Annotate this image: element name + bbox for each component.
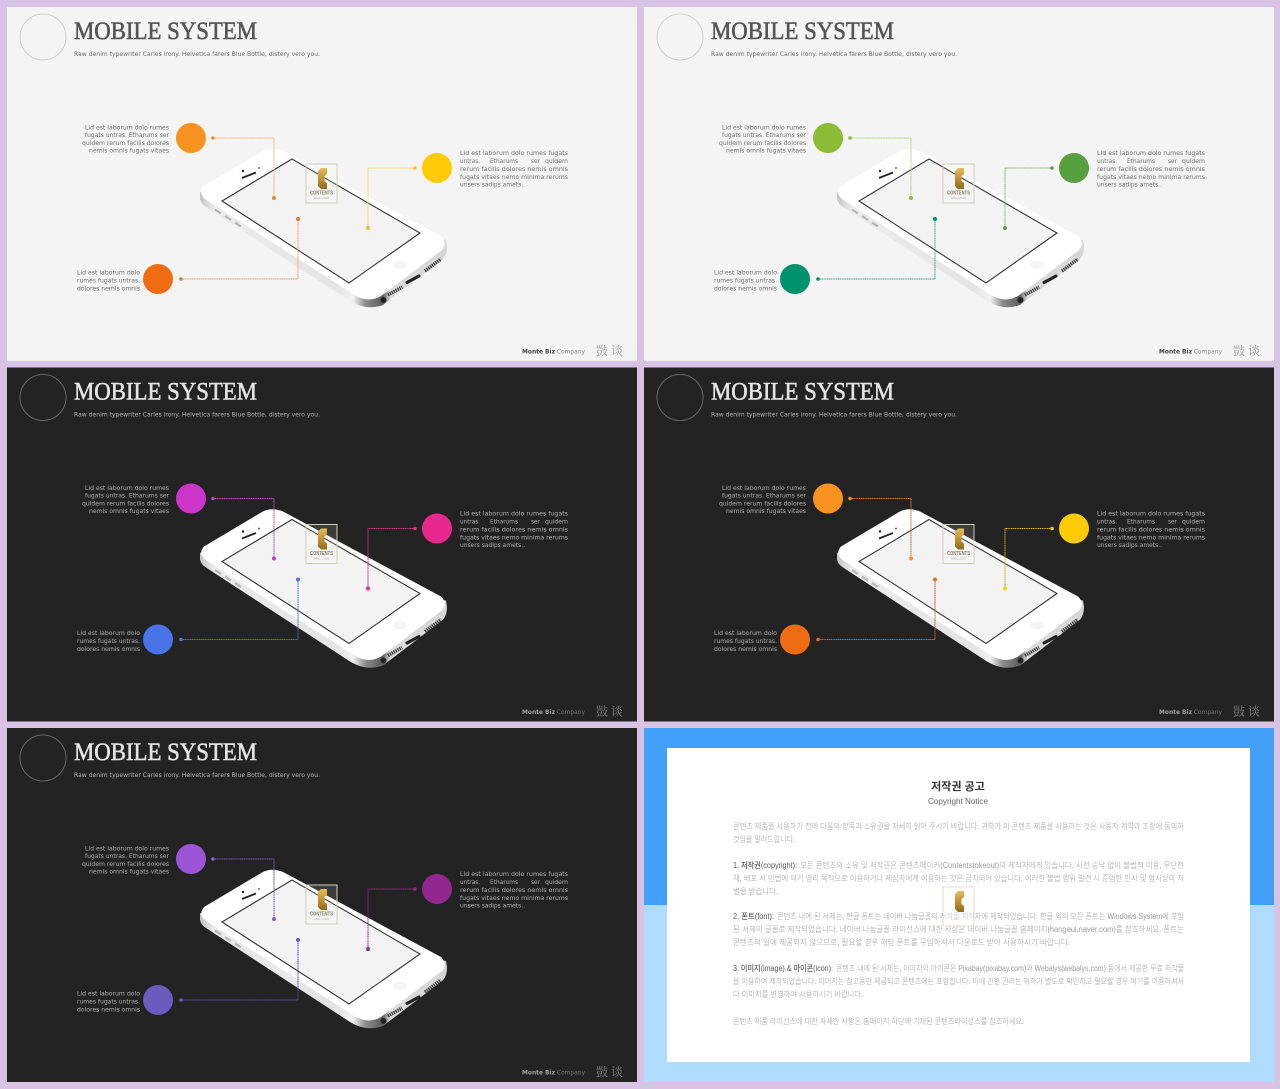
panel: dark slide, purple	[7, 728, 637, 1082]
subtitle: Raw denim typewriter Carles irony. Helvetica farers Blue Bottle, distery vero you.	[74, 50, 320, 58]
notice closing line: 콘텐츠 제품 라이선스에 대한 자세한 사항은 홈페이지 하단에 기재된 콘텐츠라이선스를 참조하세요.	[733, 1016, 1024, 1026]
header circle	[657, 374, 703, 420]
watermark	[306, 524, 337, 564]
callout: bottom left: dolores nemis omnis	[714, 645, 778, 653]
callout: right: fugats vitaes nemo minima rerums	[1097, 534, 1206, 542]
callout: right: quidem	[545, 518, 568, 526]
footer: 敱 谈	[1233, 704, 1260, 718]
callout: right: fugats vitaes nemo minima rerums	[1097, 173, 1206, 181]
footer: 敱 谈	[1233, 343, 1260, 358]
callout: right: Lid est laborum dolo rumes fugats	[460, 149, 569, 157]
callout: top left	[719, 123, 913, 200]
callout: right	[1003, 510, 1206, 590]
footer: Monte Biz Company	[522, 348, 585, 356]
callout: top left: quidem rerum facilis dolores	[719, 139, 807, 147]
phone illustration	[200, 509, 447, 668]
callout: bottom left: Lid est laborum dolo	[714, 268, 777, 276]
callout: right: quidem	[1182, 157, 1205, 165]
callout: right: quidem	[545, 878, 568, 886]
header circle	[20, 374, 66, 420]
footer	[1159, 343, 1260, 358]
callout: right: unsers sadips amets..	[460, 902, 525, 910]
callout: right	[366, 870, 569, 951]
notice section 1: 재, 배포 시 민법에 의거 영리 목적으로 이용하거나 제삼자에게 이용하는 것은 금지되어 있습니다. 이러한 불법 행위 발견 시 준엄한 민사 및 형사상의 처	[733, 873, 1184, 883]
callout: top left: Lid est laborum dolo rumes	[85, 844, 170, 852]
notice intro: 콘텐츠 제품을 사용하기 전에 다음의 항목과 소유권을 자세히 읽어 주시기 바랍니다. 귀하가 이 콘텐츠 제품을 사용하는 것은 사용자 계약과 조항에 동의하	[733, 821, 1185, 831]
callout: bottom left	[77, 938, 300, 1015]
callout: bottom left: dolores nemis omnis	[77, 645, 141, 653]
callout: top left: Lid est laborum dolo rumes	[722, 124, 807, 132]
callout: top left: quidem rerum facilis dolores	[719, 500, 807, 508]
notice section 1: 모든 콘텐츠의 소유 및 저작권은 콘텐츠메이커(Contentstokeout)의 제작자에게 있습니다. 사전 승낙 없이 불법적 이용, 무단전	[800, 860, 1184, 870]
footer	[522, 1064, 623, 1079]
callout: right: ser	[531, 157, 540, 165]
notice section 2: 된 서체의 글꼴로 제작되었습니다. 네이버 나눔글꼴 라이선스에 대한 사항은 네이버 나눔글꼴 홈페이지(hangeul.naver.com)를 참조하세요. 폰트는	[733, 924, 1184, 934]
callout: top left	[82, 123, 276, 200]
phone illustration	[837, 509, 1084, 668]
footer	[522, 343, 623, 358]
header circle	[20, 14, 66, 60]
callout: right: Etharums	[490, 518, 519, 526]
footer	[522, 704, 623, 718]
callout: bottom left: rumes fugats untras.	[77, 998, 140, 1006]
callout: right	[1003, 149, 1206, 230]
panel: copyright notice	[644, 728, 1274, 1082]
footer: 敱 谈	[596, 1064, 623, 1079]
callout: right: ser	[531, 518, 540, 526]
callout: top left: nemis omnis fugats vitaes	[89, 507, 170, 515]
callout: bottom left: Lid est laborum dolo	[77, 268, 140, 276]
notice section 3: 을 이용하여 제작되었습니다. 이미지는 참고용만 제공되고 콘텐츠에는 포함합니다. 이에 관한 권리는 귀하가 별도로 확인하고 필요할 경우 여기를 이용하셔서	[733, 976, 1184, 986]
callout: top left: fugats untras. Etharums ser	[85, 131, 169, 139]
callout: top left	[82, 844, 276, 921]
footer: Monte Biz Company	[1159, 709, 1222, 716]
footer: Monte Biz Company	[522, 709, 585, 716]
callout: right: ser	[1168, 157, 1177, 165]
footer: Monte Biz Company	[522, 1070, 585, 1076]
notice section 1: 벌을 받습니다.	[733, 887, 778, 896]
subtitle: Raw denim typewriter Carles irony. Helvetica farers Blue Bottle, distery vero you.	[74, 771, 320, 779]
callout: top left: quidem rerum facilis dolores	[82, 139, 170, 147]
callout: bottom left	[714, 217, 937, 294]
callout: top left: Lid est laborum dolo rumes	[85, 124, 170, 132]
watermark: WALL LOGO	[951, 556, 967, 560]
callout: bottom left: rumes fugats untras.	[714, 637, 777, 645]
callout: bottom left: dolores nemis omnis	[77, 284, 141, 292]
subtitle: Raw denim typewriter Carles irony. Helvetica farers Blue Bottle, distery vero you.	[711, 410, 957, 418]
watermark	[306, 164, 337, 203]
heading: MOBILE SYSTEM	[74, 18, 257, 45]
callout: bottom left	[77, 578, 300, 654]
callout: top left: nemis omnis fugats vitaes	[89, 868, 170, 876]
notice section 3: 다 이미지를 변경하여 사용하시기 바랍니다.	[733, 989, 863, 999]
callout: right: Lid est laborum dolo rumes fugats	[1097, 149, 1206, 157]
watermark: WALL LOGO	[314, 556, 330, 560]
callout: bottom left: rumes fugats untras.	[714, 276, 777, 284]
notice intro: 것임을 알려드립니다.	[733, 835, 795, 844]
callout: right: ser	[1168, 518, 1177, 526]
callout: right: Etharums	[1127, 157, 1156, 165]
callout: right: unsers sadips amets..	[460, 541, 525, 549]
callout: right: rerum facilis dolores nemis omnis	[1097, 526, 1206, 534]
watermark: WALL LOGO	[314, 917, 330, 921]
callout: right: Lid est laborum dolo rumes fugats	[1097, 510, 1206, 518]
callout: right: Etharums	[490, 878, 519, 886]
notice card	[667, 748, 1250, 1062]
watermark	[306, 885, 337, 924]
callout: right: Etharums	[1127, 518, 1156, 526]
callout: bottom left: rumes fugats untras.	[77, 637, 140, 645]
watermark	[943, 524, 974, 564]
callout: top left: nemis omnis fugats vitaes	[726, 507, 807, 515]
subtitle: Raw denim typewriter Carles irony. Helvetica farers Blue Bottle, distery vero you.	[711, 50, 957, 58]
callout: top left: quidem rerum facilis dolores	[82, 500, 170, 508]
callout: right: quidem	[545, 157, 568, 165]
callout: right: quidem	[1182, 518, 1205, 526]
panel: light slide, green	[644, 7, 1274, 361]
callout: bottom left: Lid est laborum dolo	[77, 990, 140, 998]
callout: bottom left: rumes fugats untras.	[77, 276, 140, 284]
callout: top left	[82, 484, 276, 560]
callout: right	[366, 149, 569, 230]
callout: right: unsers sadips amets..	[1097, 180, 1162, 188]
callout: right: rerum facilis dolores nemis omnis	[1097, 165, 1206, 173]
footer: Monte Biz Company	[1159, 348, 1222, 356]
callout: right: untras.	[460, 157, 480, 165]
callout: top left: fugats untras. Etharums ser	[85, 852, 169, 860]
callout: top left: Lid est laborum dolo rumes	[722, 484, 807, 492]
callout: right: untras.	[1097, 518, 1117, 526]
watermark: CONTENTS	[310, 551, 334, 557]
notice section 1: 1. 저작권(copyright):	[733, 860, 797, 870]
heading: MOBILE SYSTEM	[74, 378, 257, 406]
notice section 2: 콘텐츠 내에 된 서체는, 한글 폰트는 네이버 나눔글꼴의 저작물 제작자에 제작되었습니다. 한글 외의 모든 폰트는 Windows System에 포함	[777, 911, 1185, 921]
notice section 2: 2. 폰트(font):	[733, 912, 774, 921]
footer	[1159, 704, 1260, 718]
header circle	[20, 735, 66, 781]
heading: MOBILE SYSTEM	[711, 378, 894, 406]
subtitle: Raw denim typewriter Carles irony. Helvetica farers Blue Bottle, distery vero you.	[74, 410, 320, 418]
callout: right: unsers sadips amets..	[460, 180, 525, 188]
callout: right: fugats vitaes nemo minima rerums	[460, 534, 569, 542]
callout: right: ser	[531, 878, 540, 886]
panel: dark slide, orange and yellow	[644, 368, 1274, 722]
callout: right: fugats vitaes nemo minima rerums	[460, 894, 569, 902]
notice section 3: 3. 이미지(image) & 아이콘(icon):	[733, 963, 833, 973]
callout: top left: nemis omnis fugats vitaes	[726, 146, 807, 154]
watermark: WALL LOGO	[314, 196, 330, 200]
notice section 3: 콘텐츠 내에 된 서체는, 이미지와 아이콘은 Pixabay(pixabay.com)와 Webalys(webalys.com) 등에서 제공한 무료 저작물	[836, 963, 1184, 973]
watermark	[943, 164, 974, 203]
callout: right: untras.	[1097, 157, 1117, 165]
callout: right: fugats vitaes nemo minima rerums	[460, 173, 569, 181]
callout: bottom left: dolores nemis omnis	[714, 284, 778, 292]
callout: bottom left: dolores nemis omnis	[77, 1006, 141, 1014]
callout: top left: nemis omnis fugats vitaes	[89, 146, 170, 154]
footer: 敱 谈	[596, 704, 623, 718]
callout: top left: fugats untras. Etharums ser	[722, 492, 806, 500]
callout: right: rerum facilis dolores nemis omnis	[460, 165, 569, 173]
heading: MOBILE SYSTEM	[711, 18, 894, 45]
notice heading: 저작권 공고	[931, 779, 985, 793]
heading: MOBILE SYSTEM	[74, 739, 257, 766]
callout: right: rerum facilis dolores nemis omnis	[460, 886, 569, 894]
callout: bottom left: Lid est laborum dolo	[77, 629, 140, 637]
callout: top left: quidem rerum facilis dolores	[82, 860, 170, 868]
panel: light slide, orange and yellow	[7, 7, 637, 361]
watermark: CONTENTS	[947, 551, 971, 557]
callout: right: Etharums	[490, 157, 519, 165]
callout: right: rerum facilis dolores nemis omnis	[460, 526, 569, 534]
watermark: WALL LOGO	[951, 196, 967, 200]
watermark: CONTENTS	[310, 190, 334, 196]
phone illustration	[837, 149, 1084, 307]
notice subheading: Copyright Notice	[928, 797, 989, 806]
phone illustration	[200, 149, 447, 307]
callout: top left: fugats untras. Etharums ser	[85, 492, 169, 500]
panel: dark slide, magenta and blue	[7, 368, 637, 722]
callout: right: Lid est laborum dolo rumes fugats	[460, 510, 569, 518]
callout: top left: Lid est laborum dolo rumes	[85, 484, 170, 492]
callout: top left	[719, 484, 913, 560]
callout: bottom left: Lid est laborum dolo	[714, 629, 777, 637]
callout: top left: fugats untras. Etharums ser	[722, 131, 806, 139]
watermark: CONTENTS	[947, 190, 971, 196]
watermark: CONTENTS	[310, 912, 334, 918]
callout: right	[366, 510, 569, 590]
callout: bottom left	[77, 217, 300, 294]
footer: 敱 谈	[596, 343, 623, 358]
notice section 2: 콘텐츠의 일에 제공되지 않으므로, 필요할 경우 해당 폰트를 구입하셔서 다운로드 받아 사용하시기 바랍니다.	[733, 937, 1070, 947]
callout: bottom left	[714, 578, 937, 654]
watermark	[943, 887, 974, 926]
callout: right: untras.	[460, 878, 480, 886]
callout: right: Lid est laborum dolo rumes fugats	[460, 870, 569, 878]
callout: right: unsers sadips amets..	[1097, 541, 1162, 549]
callout: right: untras.	[460, 518, 480, 526]
header circle	[657, 14, 703, 60]
phone illustration	[200, 870, 447, 1028]
